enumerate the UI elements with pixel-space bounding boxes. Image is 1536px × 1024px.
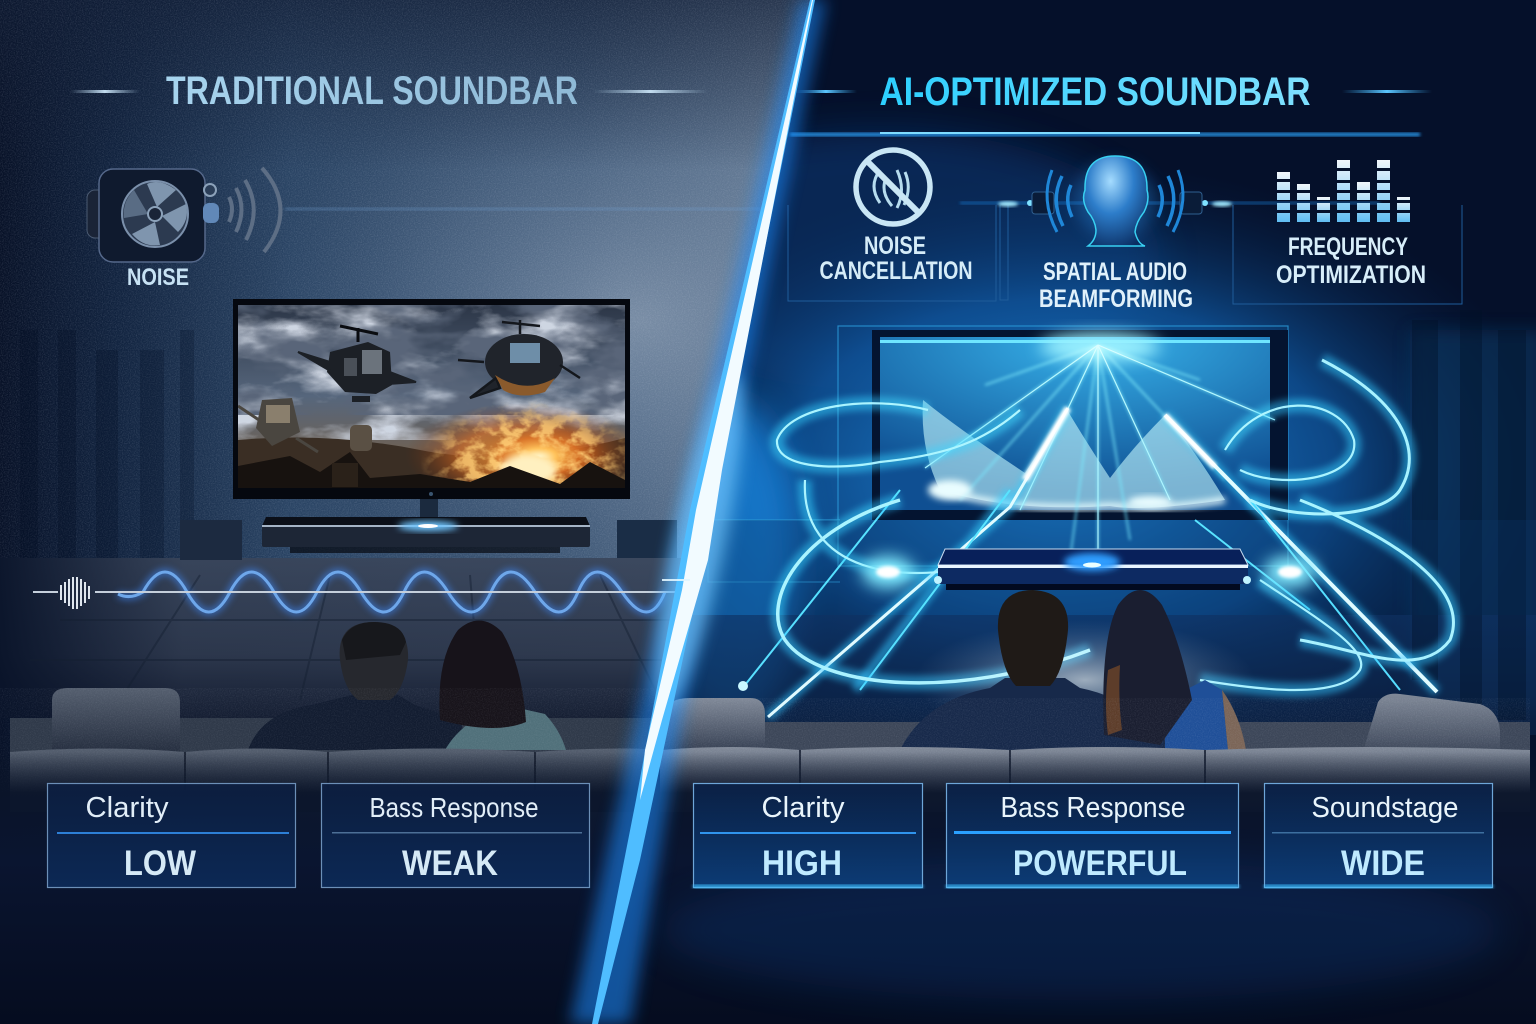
helicopter: left background bbox=[238, 398, 372, 452]
metric card: bass response powerful bbox=[946, 784, 1239, 888]
helicopter: right bbox=[458, 320, 580, 398]
wall acoustic panels bbox=[20, 330, 194, 558]
panel: ai-optimized soundbar bbox=[560, 0, 1536, 1024]
metric card: clarity low: Clarity bbox=[86, 792, 169, 824]
metric card: clarity high: HIGH bbox=[762, 844, 842, 883]
noise cancellation label bbox=[820, 236, 972, 279]
subwoofer boxes bbox=[180, 520, 677, 560]
metric card: soundstage wide bbox=[1264, 784, 1493, 888]
couple left bbox=[248, 620, 566, 750]
frequency optimization label bbox=[1276, 233, 1426, 289]
noise label: NOISE bbox=[127, 264, 189, 291]
heading: traditional soundbar: TRADITIONAL SOUNDBAR bbox=[166, 69, 578, 113]
sound wave with flat line bbox=[33, 572, 680, 612]
dark background bbox=[799, 0, 1536, 768]
icon: noise cancellation bbox=[856, 150, 930, 224]
fan rays bbox=[925, 345, 1275, 580]
metric card: clarity high: Clarity bbox=[762, 792, 845, 824]
metric card: soundstage wide: Soundstage bbox=[1312, 792, 1458, 824]
metric card: bass response powerful: POWERFUL bbox=[1013, 844, 1187, 883]
icon: frequency equalizer bbox=[1277, 160, 1410, 222]
couch left back bbox=[10, 688, 652, 752]
frequency optimization label: OPTIMIZATION bbox=[1276, 261, 1426, 289]
metric card: bass response weak bbox=[322, 784, 590, 888]
couch right seat bbox=[590, 698, 1536, 1024]
main beams glow bbox=[768, 408, 1437, 717]
couch right back bbox=[660, 694, 1530, 760]
outer frames bbox=[708, 326, 1288, 582]
metric card: clarity low: LOW bbox=[124, 844, 196, 883]
metric card: clarity high bbox=[693, 784, 923, 888]
frequency optimization label: FREQUENCY bbox=[1288, 233, 1408, 261]
feature box outlines bbox=[788, 205, 1462, 304]
heading: ai-optimized soundbar: AI-OPTIMIZED SOUNDBAR bbox=[880, 70, 1311, 114]
connector glow line bbox=[960, 192, 1380, 214]
traditional soundbar bbox=[262, 517, 590, 553]
metric card: bass response powerful: Bass Response bbox=[1000, 792, 1186, 824]
metric card: bass response weak: Bass Response bbox=[370, 792, 538, 823]
spatial audio label bbox=[1040, 262, 1192, 307]
metric card: bass response weak: WEAK bbox=[402, 844, 498, 883]
tv: battle scene bbox=[233, 299, 645, 517]
icon: noise fan box bbox=[87, 168, 281, 262]
icon: head with sound waves bbox=[1047, 156, 1183, 246]
diagonal divider beam bbox=[570, 0, 826, 1024]
spatial audio label: BEAMFORMING bbox=[1039, 285, 1193, 313]
spatial audio label: SPATIAL AUDIO bbox=[1043, 258, 1187, 286]
metric card: soundstage wide: WIDE bbox=[1341, 844, 1425, 883]
wave surface bbox=[923, 400, 1225, 508]
ai soundbar bbox=[934, 549, 1251, 590]
couch left seat bbox=[0, 688, 645, 1024]
wall background bbox=[0, 0, 810, 764]
right wall panels bbox=[1412, 310, 1526, 720]
bottom blue glow bbox=[660, 860, 1500, 1000]
ai tv screen bbox=[872, 330, 1288, 520]
couple right bbox=[900, 590, 1246, 750]
metric card: clarity low bbox=[48, 784, 296, 888]
bright nodes bbox=[862, 556, 914, 588]
floor bbox=[0, 558, 681, 718]
helicopter: center bbox=[298, 326, 416, 402]
panel: traditional soundbar bbox=[0, 0, 810, 956]
noise cancellation label: CANCELLATION bbox=[820, 257, 972, 285]
light beams and orbits bbox=[738, 345, 1453, 717]
orbit glows bbox=[777, 360, 1453, 690]
noise cancellation label: NOISE bbox=[864, 232, 926, 260]
